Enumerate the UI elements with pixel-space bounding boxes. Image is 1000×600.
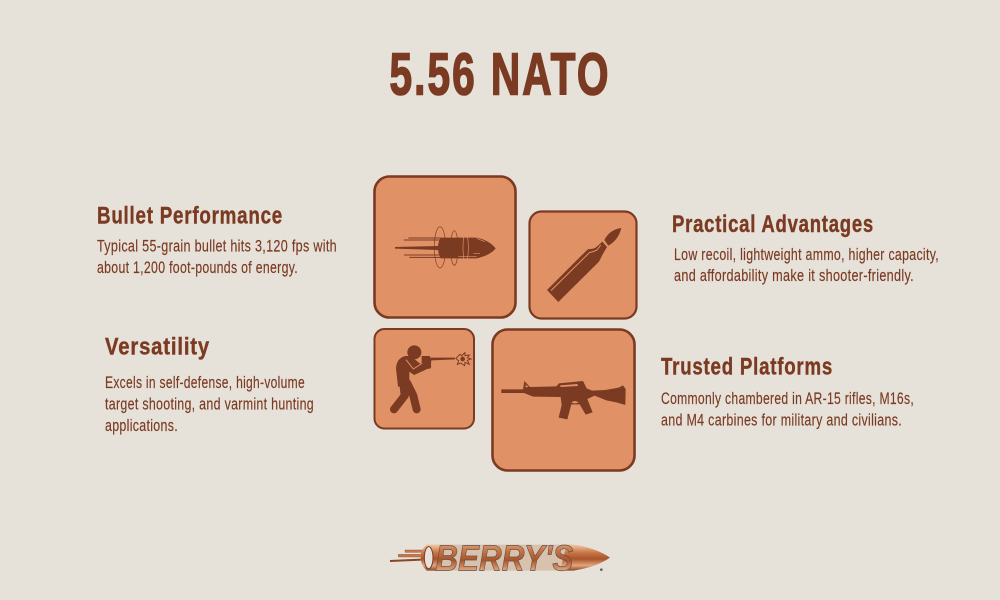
panel: shooter icon tile (374, 329, 474, 428)
icon: M4 carbine rifle (501, 381, 626, 419)
panel: cartridge icon tile (530, 212, 636, 318)
text block: bullet performance: about 1,200 foot-pounds of energy. (97, 259, 298, 277)
text block: versatility (105, 374, 314, 435)
text block: trusted platforms: and M4 carbines for military and civilians. (661, 412, 902, 430)
title: 5.56 NATO (390, 42, 610, 108)
panel: bullet icon tile (374, 176, 516, 318)
icon: shooter firing rifle (394, 345, 471, 409)
heading: bullet performance: Bullet Performance (97, 202, 283, 230)
text block: bullet performance: Typical 55-grain bullet hits 3,120 fps with (97, 238, 337, 256)
text block: trusted platforms (661, 390, 914, 430)
logo: Berry's bullet: BERRY'S (435, 538, 573, 579)
heading: practical advantages: Practical Advantages (672, 211, 874, 238)
heading: versatility: Versatility (105, 334, 210, 360)
panel: versatility text (105, 334, 314, 435)
panel: rifle icon tile (492, 330, 634, 470)
panel: trusted platforms text (661, 354, 914, 430)
heading: trusted platforms: Trusted Platforms (661, 354, 833, 380)
text block: versatility: target shooting, and varmint hunting (105, 396, 314, 414)
text block: bullet performance (97, 238, 337, 277)
text block: trusted platforms: Commonly chambered in AR-15 rifles, M16s, (661, 390, 914, 408)
panel: bullet performance text (97, 202, 337, 277)
text block: versatility: applications. (105, 417, 178, 435)
icon: rifle cartridge (547, 228, 621, 302)
icon: speeding bullet (395, 227, 496, 268)
text block: versatility: Excels in self-defense, high-volume (105, 374, 305, 392)
panel: practical advantages text (672, 211, 939, 285)
text block: practical advantages (674, 246, 939, 285)
text block: practical advantages: and affordability make it shooter-friendly. (674, 267, 914, 285)
